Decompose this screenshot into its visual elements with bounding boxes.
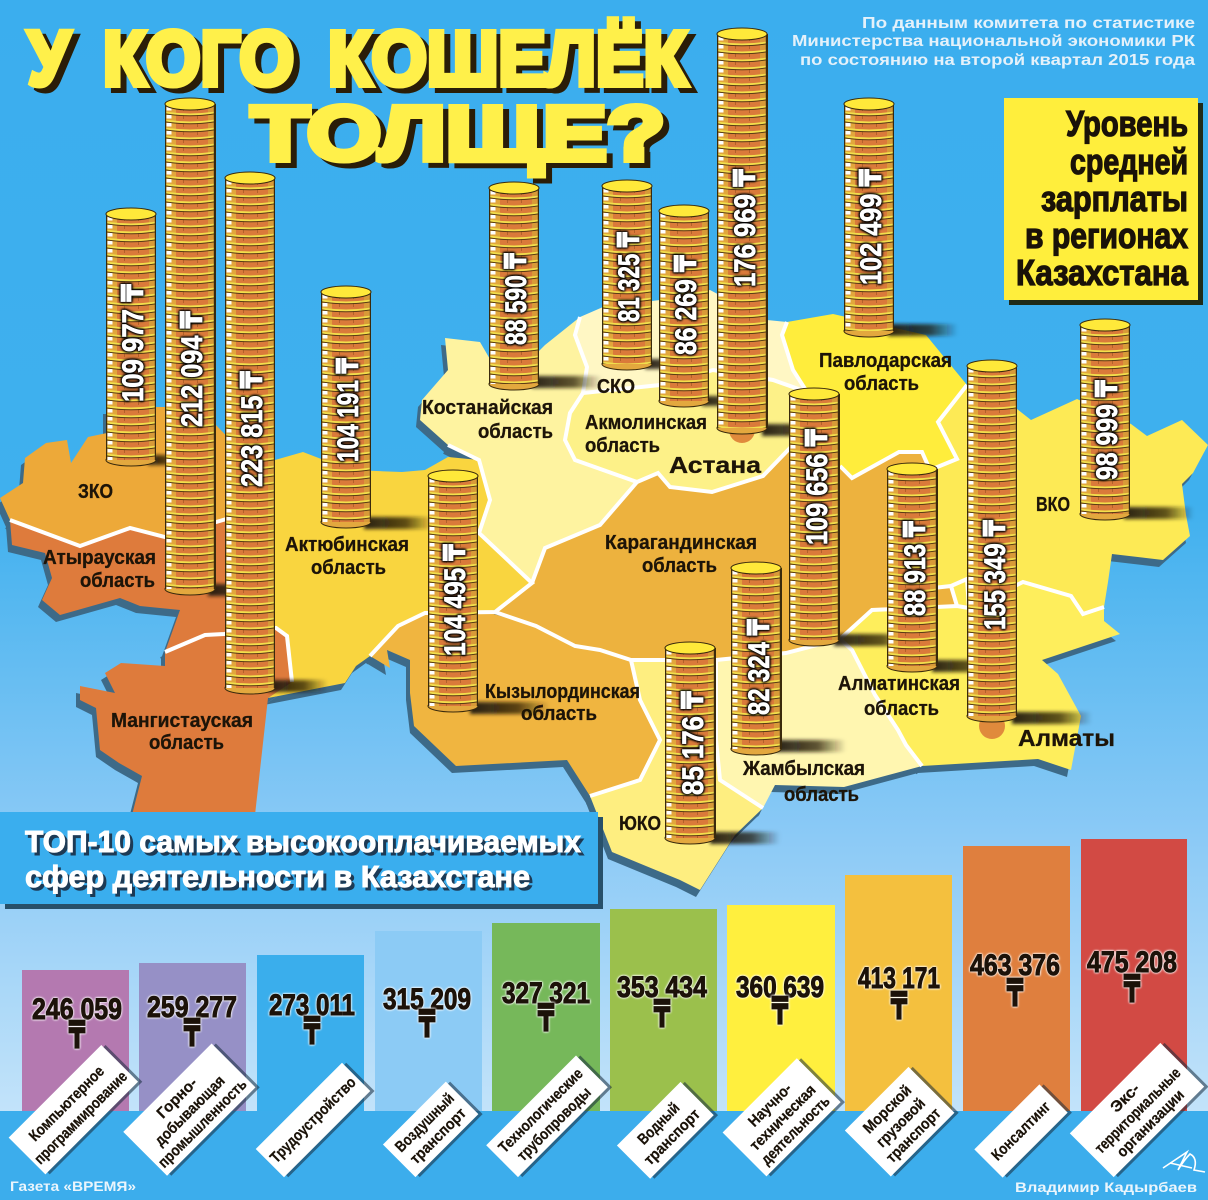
ticket: Водный транспорт: Водный: [635, 1100, 683, 1148]
coin stack: Павлодарская 102 499: [844, 98, 894, 337]
label: Акмолинская: область: [585, 435, 660, 457]
ticket: Экс-территориальные организации: организации: [1114, 1087, 1188, 1161]
bar: Трудоустройство: 273 011: [269, 989, 355, 1022]
title: ТОЛЩЕ?: [257, 96, 671, 182]
label: Мангистауская: Мангистауская: [111, 710, 253, 732]
label: Мангистауская: область: [149, 732, 224, 754]
coin stack: Жамбылская 82 324: 82 324 ₸: [743, 619, 776, 715]
ticket: Технологические трубопроводы: трубопроводы: [514, 1084, 595, 1165]
top-10 heading banner: ТОП-10 самых высокооплачиваемых: [28, 827, 585, 862]
ticket: Экс-территориальные организации: территориальные: [1092, 1065, 1185, 1157]
label: Кызылординская: Кызылординская: [485, 681, 640, 703]
ticket: Воздушный транспорт: Воздушный: [392, 1090, 458, 1156]
ticket: Водный транспорт: транспорт: [641, 1106, 704, 1169]
bar: Научно-техническая деятельность: 360 639: [736, 971, 824, 1004]
bar: Воздушный транспорт: 315 209: [383, 983, 471, 1016]
bar: Морской грузовой транспорт: 413 171: [858, 962, 940, 995]
coin stack: Карагандинская 109 656: 109 656 ₸: [801, 429, 834, 545]
coin stack: Павлодарская 102 499: 102 499 ₸: [855, 169, 888, 285]
top-10 heading banner: ТОП-10 самых высокооплачиваемых: [25, 824, 582, 859]
title: КОГО: [109, 21, 300, 107]
label: Карагандинская: [605, 532, 757, 577]
label: Акмолинская: Акмолинская: [585, 412, 707, 434]
label: СКО: СКО: [597, 376, 635, 398]
coin stack: Алматы 155 349: 155 349 ₸: [979, 520, 1012, 630]
bar: Компьютерное программирование: [22, 970, 129, 1111]
label: Алматы: Алматы: [1018, 725, 1115, 751]
bar: Морской грузовой транспорт: ₸: [890, 986, 908, 1028]
region: Алматинская область: [840, 582, 1120, 770]
coin stack: ВКО 98 999: 98 999 ₸: [1091, 380, 1124, 480]
title: ТОЛЩЕ?: [251, 91, 665, 177]
bar chart: top-10: [22, 839, 1187, 1111]
label: Павлодарская: Павлодарская: [819, 350, 952, 372]
bar: Консалтинг: ₸: [1006, 973, 1024, 1015]
bar: Морской грузовой транспорт: [845, 875, 952, 1111]
coin stack: Атырауская 212 094: [165, 98, 216, 595]
bar: Технологические трубопроводы: ₸: [538, 998, 554, 1040]
bar: Научно-техническая деятельность: ₸: [772, 991, 788, 1033]
ticket: Компьютерное программирование: программирование: [31, 1068, 131, 1168]
bar: Воздушный транспорт: [375, 931, 482, 1111]
footer: author: Владимир Кадырбаев: [1015, 1179, 1197, 1195]
coin stack: Алматы 155 349: [967, 360, 1017, 722]
bar: Консалтинг: 463 376: [970, 949, 1060, 982]
region: Акмолинская область: [565, 370, 812, 492]
coin stack: Алматинская 88 913: [887, 463, 938, 672]
coin stack: Атырауская 212 094: 212 094 ₸: [176, 311, 209, 427]
label: ЮКО: ЮКО: [619, 813, 661, 835]
label: Кызылординская: [485, 681, 640, 725]
coin stack: ЮКО 85 176: 85 176 ₸: [677, 691, 710, 795]
ticket: Научно-техническая деятельность: [723, 1056, 845, 1179]
label: Акмолинская: [585, 412, 707, 457]
label: Атырауская: область: [80, 570, 155, 592]
label: Алматинская: [838, 673, 960, 720]
bar: Консалтинг: [963, 846, 1070, 1111]
top-10 heading banner: сфер деятельности в Казахстане: [28, 862, 533, 897]
ticket: Научно-техническая деятельность: техническая: [747, 1082, 819, 1154]
region: СКО: [575, 290, 807, 393]
label: Костанайская: область: [478, 421, 553, 443]
label: Карагандинская: область: [642, 555, 717, 577]
label: Алматинская: область: [864, 698, 939, 720]
coin stack: Алматинская 88 913: 88 913 ₸: [899, 521, 932, 616]
label: Костанайская: Костанайская: [422, 397, 553, 419]
label: Павлодарская: область: [844, 373, 919, 395]
bar: Экс-территориальные организации: [1081, 839, 1187, 1111]
label: Астана: Астана: [669, 452, 761, 478]
region: Атырауская область: [10, 515, 240, 652]
label: Алматинская: Алматинская: [838, 673, 960, 695]
label: Карагандинская: Карагандинская: [605, 532, 757, 554]
ticket: Морской грузовой транспорт: Морской: [860, 1082, 915, 1137]
coin stack: ЮКО 85 176: [665, 642, 716, 844]
title: КОГО: [103, 16, 294, 102]
label: Актюбинская: [285, 534, 409, 579]
bar: Воздушный транспорт: ₸: [418, 1004, 436, 1046]
city marker: Астана: [729, 417, 755, 443]
ticket: Водный транспорт: [617, 1080, 718, 1181]
ticket: Экс-территориальные организации: [1070, 1041, 1208, 1179]
bottom band: [0, 1111, 1208, 1200]
title: У: [28, 16, 71, 102]
label: Актюбинская: Актюбинская: [285, 534, 409, 556]
label: Атырауская: [43, 547, 156, 592]
bar: Трудоустройство: [257, 955, 364, 1111]
title: КОШЕЛЁК: [334, 21, 694, 107]
coin stack: ЗКО 109 977: 109 977 ₸: [117, 284, 150, 402]
region: Павлодарская область: [782, 314, 967, 478]
bar: Технологические трубопроводы: 327 321: [502, 977, 590, 1010]
region labels: [43, 350, 1115, 835]
ticket: Морской грузовой транспорт: [845, 1065, 959, 1179]
source note: [792, 15, 1196, 69]
ticket: Воздушный транспорт: транспорт: [407, 1105, 470, 1168]
source note: по состоянию на второй квартал 2015 года: [800, 52, 1195, 69]
ticket: Горно-добывающая промышленность: промышленность: [155, 1076, 251, 1172]
bar: Компьютерное программирование: 246 059: [32, 993, 122, 1026]
coin stack: Актюбинская 104 191: [321, 286, 371, 528]
bar: Водный транспорт: 353 434: [617, 971, 707, 1004]
icon: signature: [1163, 1152, 1205, 1172]
bar: Экс-территориальные организации: 475 208: [1087, 946, 1177, 979]
region: ЗКО: [0, 407, 240, 546]
label: Жамбылская: Жамбылская: [742, 758, 865, 780]
coin stack: Костанайская 88 590: 88 590 ₸: [500, 253, 533, 345]
label: Жамбылская: [742, 758, 865, 806]
ticket: Морской грузовой транспорт: транспорт: [883, 1105, 945, 1167]
label: ВКО: ВКО: [1036, 494, 1070, 516]
bar: Водный транспорт: ₸: [654, 994, 670, 1036]
label: Павлодарская: [819, 350, 952, 395]
source note: По данным комитета по статистике: [862, 15, 1195, 32]
bar: Научно-техническая деятельность: [727, 905, 835, 1111]
bar: Горно-добывающая промышленность: [139, 963, 246, 1111]
region: Актюбинская область: [240, 452, 532, 698]
title: КОШЕЛЁК: [328, 16, 688, 102]
coin stack: Мангистауская 223 815: [225, 172, 275, 694]
region: Карагандинская область: [495, 430, 957, 660]
ticket: Научно-техническая деятельность: Научно-: [745, 1080, 795, 1130]
coin stack: Акмолинская 86 269: 86 269 ₸: [670, 255, 703, 355]
region: Кызылординская область: [370, 613, 660, 796]
coin stack: Актюбинская 104 191: 104 191 ₸: [332, 358, 365, 462]
coin stack: ЗКО 109 977: [106, 208, 156, 466]
map of Kazakhstan: [0, 290, 1208, 890]
coin stack: Костанайская 88 590: [489, 182, 539, 390]
label: Кызылординская: область: [521, 703, 597, 725]
ticket: Горно-добывающая промышленность: добывающая: [152, 1073, 229, 1150]
coin stack: Карагандинская 109 656: [789, 388, 840, 646]
label: Актюбинская: область: [311, 557, 386, 579]
yellow subtitle box: [1004, 98, 1203, 305]
ticket: Технологические трубопроводы: [486, 1053, 612, 1179]
label: Атырауская: Атырауская: [43, 547, 156, 569]
region: Мангистауская область: [80, 628, 292, 815]
coin stack: Астана 176 969: 176 969 ₸: [729, 169, 762, 287]
bar: Горно-добывающая промышленность: ₸: [184, 1013, 200, 1055]
top-10 heading banner: [0, 812, 603, 909]
ticket: Горно-добывающая промышленность: [123, 1041, 260, 1178]
label: Мангистауская: [111, 710, 253, 754]
coin stack: СКО 81 325: 81 325 ₸: [613, 232, 646, 322]
region: Жамбылская область: [716, 639, 922, 808]
label: Костанайская: [422, 397, 553, 443]
bar: Компьютерное программирование: ₸: [68, 1015, 86, 1057]
bar: Водный транспорт: [610, 909, 717, 1111]
region: ВКО: [915, 385, 1208, 614]
footer: newspaper: Газета «ВРЕМЯ»: [10, 1178, 136, 1194]
bar: Трудоустройство: ₸: [304, 1011, 320, 1053]
coin stack: Мангистауская 223 815: 223 815 ₸: [236, 371, 269, 487]
source note: Министерства национальной экономики РК: [792, 33, 1196, 50]
title: У: [34, 21, 77, 107]
top-10 heading banner: сфер деятельности в Казахстане: [25, 859, 530, 894]
stack shadows: [148, 324, 1194, 844]
ticket: Трудоустройство: Трудоустройство: [267, 1074, 360, 1167]
ticket: Воздушный транспорт: [383, 1080, 483, 1179]
bar: Экс-территориальные организации: ₸: [1124, 969, 1140, 1011]
ticket: Консалтинг: Консалтинг: [988, 1098, 1055, 1164]
ticket: Экс-территориальные организации: Экс-: [1107, 1080, 1143, 1116]
coin stack: ВКО 98 999: [1080, 319, 1130, 520]
bar: Горно-добывающая промышленность: 259 277: [147, 991, 237, 1024]
label: ЗКО: ЗКО: [78, 481, 113, 503]
ticket: Компьютерное программирование: Компьютерное: [26, 1063, 108, 1145]
city marker: Алматы: [979, 713, 1005, 739]
title: [28, 16, 694, 182]
coin stack: Акмолинская 86 269: [659, 205, 709, 407]
ticket: Морской грузовой транспорт: грузовой: [873, 1095, 929, 1151]
coin stack: Кызылординская 104 495: 104 495 ₸: [439, 544, 472, 656]
coin stack: СКО 81 325: [602, 180, 652, 370]
ticket: Горно-добывающая промышленность: Горно-: [154, 1075, 201, 1122]
ticket: Консалтинг: [974, 1082, 1072, 1180]
region: ЮКО: [590, 660, 763, 890]
coin stack: Жамбылская 82 324: [731, 562, 782, 755]
coin stack: Кызылординская 104 495: [428, 470, 478, 712]
region: Костанайская область: [420, 317, 637, 583]
bar: Технологические трубопроводы: [492, 923, 600, 1111]
ticket: Научно-техническая деятельность: деятельность: [758, 1093, 834, 1169]
label: Жамбылская: область: [784, 784, 859, 806]
ticket: Технологические трубопроводы: Технологические: [495, 1065, 587, 1157]
coin stack: Астана 176 969: [717, 28, 768, 434]
